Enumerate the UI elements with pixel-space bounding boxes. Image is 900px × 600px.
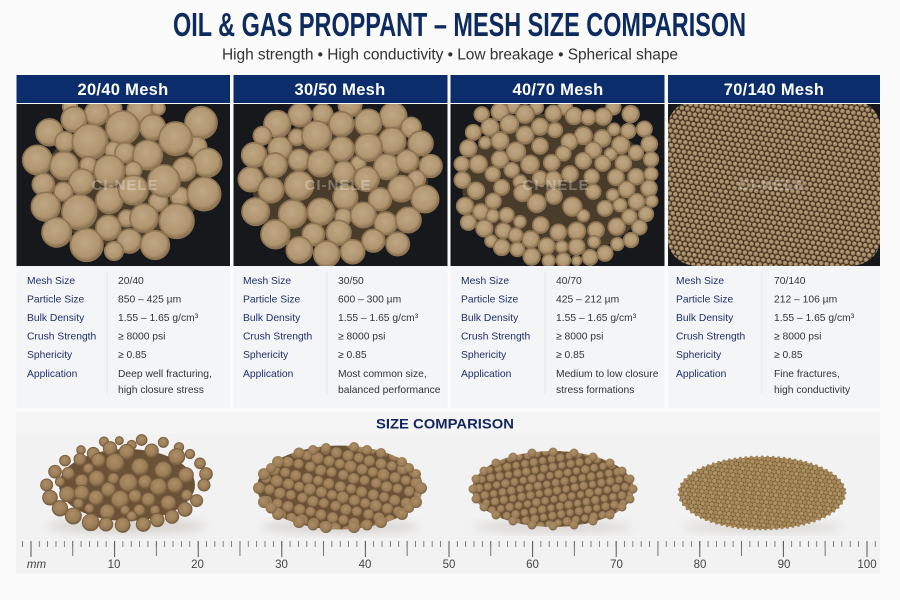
heading: 70/140 mesh: 70/140 Mesh: [724, 81, 824, 99]
subtitle: High strength • High conductivity • Low breakage • Spherical shape: [222, 46, 678, 64]
spec table: 40/70: ≥ 0.85: [556, 350, 585, 361]
heading: size comparison: SIZE COMPARISON: [376, 416, 514, 432]
photo: 40/70 proppant: [450, 100, 664, 267]
spec table: 30/50: balanced performance: [338, 385, 441, 396]
spec table: 70/140: Fine fractures,: [774, 369, 840, 380]
spec table: 70/140: ≥ 0.85: [774, 350, 803, 361]
spec table: 30/50: [234, 266, 448, 408]
spec table: 70/140: Mesh Size: [676, 276, 724, 287]
ruler: 60: [526, 559, 539, 571]
panel: 40/70 mesh: [450, 75, 664, 408]
spec table: 30/50: ≥ 0.85: [338, 350, 367, 361]
ruler: 70: [610, 559, 623, 571]
spec table: 40/70: 425 – 212 µm: [556, 294, 619, 306]
spec table: 40/70: Particle Size: [461, 294, 518, 306]
spec table: 20/40: Particle Size: [27, 294, 84, 306]
spec table: 30/50: Sphericity: [243, 350, 289, 361]
spec table: 20/40: 850 – 425 µm: [118, 294, 181, 306]
panel: 20/40 mesh: [16, 75, 230, 408]
watermark: CI-NELE: [522, 177, 590, 194]
spec table: 30/50: 30/50: [338, 276, 364, 287]
pile: 20/40: [41, 435, 212, 533]
heading: 30/50 mesh: 30/50 Mesh: [294, 81, 386, 99]
spec table: 70/140: 70/140: [774, 276, 806, 287]
spec table: 70/140: 212 – 106 µm: [774, 294, 837, 306]
spec table: 40/70: Application: [461, 369, 512, 380]
spec table: 70/140: high conductivity: [774, 385, 851, 396]
heading: 20/40 mesh: [16, 75, 230, 103]
ruler: 80: [694, 559, 706, 571]
heading: 40/70 mesh: 40/70 Mesh: [512, 81, 604, 99]
spec table: 70/140: ≥ 8000 psi: [774, 332, 821, 342]
spec table: 70/140: Crush Strength: [676, 332, 746, 342]
spec table: 40/70: Crush Strength: [461, 332, 531, 342]
pile: 70/140: [679, 457, 845, 532]
ruler: 40: [359, 559, 371, 571]
spec table: 40/70: [450, 266, 664, 408]
heading: 70/140 mesh: [668, 75, 880, 103]
heading: 20/40 mesh: 20/40 Mesh: [77, 81, 169, 99]
ruler: 90: [778, 559, 790, 571]
spec table: 20/40: 1.55 – 1.65 g/cm³: [118, 313, 199, 324]
pile: 30/50: [253, 442, 427, 533]
heading: 40/70 mesh: [450, 75, 664, 103]
ruler: mm: [27, 559, 46, 571]
pile: 40/70: [468, 448, 638, 532]
spec table: 20/40: Mesh Size: [27, 276, 75, 287]
ruler: 10: [108, 559, 120, 571]
spec table: 20/40: Deep well fracturing,: [118, 369, 212, 380]
spec table: 20/40: Application: [27, 369, 78, 380]
ruler: [22, 544, 880, 571]
photo: 30/50 proppant: [234, 93, 448, 267]
spec table: 40/70: Mesh Size: [461, 276, 509, 287]
spec table: 30/50: Mesh Size: [243, 276, 291, 287]
panel: size comparison: [16, 412, 880, 574]
ruler: 20: [191, 559, 204, 571]
spec table: 70/140: Sphericity: [676, 350, 722, 361]
spec table: 70/140: 1.55 – 1.65 g/cm³: [774, 313, 855, 324]
spec table: 40/70: ≥ 8000 psi: [556, 332, 603, 342]
watermark: CI-NELE: [92, 177, 158, 194]
spec table: 70/140: Application: [676, 369, 727, 380]
ruler: 100: [857, 559, 877, 571]
watermark: CI-NELE: [738, 177, 806, 194]
spec table: 30/50: Application: [243, 369, 294, 380]
panel: 70/140 mesh: [668, 75, 880, 408]
spec table: 30/50: Most common size,: [338, 369, 427, 380]
spec table: 30/50: 600 – 300 µm: [338, 294, 401, 306]
spec table: 20/40: high closure stress: [118, 385, 204, 396]
spec table: 70/140: Particle Size: [676, 294, 733, 306]
ruler: 50: [443, 559, 455, 571]
spec table: 20/40: Sphericity: [27, 350, 73, 361]
watermark: CI-NELE: [304, 177, 372, 194]
spec table: 70/140: [668, 266, 880, 408]
spec table: 20/40: ≥ 0.85: [118, 350, 147, 361]
spec table: 70/140: Bulk Density: [676, 313, 734, 324]
spec table: 30/50: Particle Size: [243, 294, 300, 306]
panel: 30/50 mesh: [234, 75, 448, 408]
spec table: 30/50: 1.55 – 1.65 g/cm³: [338, 313, 419, 324]
spec table: 30/50: ≥ 8000 psi: [338, 332, 385, 342]
spec table: 30/50: Crush Strength: [243, 332, 313, 342]
spec table: 40/70: Bulk Density: [461, 313, 519, 324]
spec table: 40/70: Sphericity: [461, 350, 507, 361]
spec table: 20/40: [16, 266, 230, 408]
spec table: 40/70: 40/70: [556, 276, 582, 287]
photo: 20/40 proppant: [16, 97, 230, 266]
spec table: 20/40: ≥ 8000 psi: [118, 332, 165, 342]
spec table: 40/70: Medium to low closure: [556, 369, 659, 380]
spec table: 20/40: 20/40: [118, 276, 144, 287]
ruler: 30: [275, 559, 288, 571]
spec table: 30/50: Bulk Density: [243, 313, 301, 324]
spec table: 40/70: 1.55 – 1.65 g/cm³: [556, 313, 637, 324]
photo: 70/140 proppant: [668, 100, 880, 266]
heading: 30/50 mesh: [234, 75, 448, 103]
spec table: 20/40: Crush Strength: [27, 332, 97, 342]
spec table: 40/70: stress formations: [556, 385, 634, 396]
spec table: 20/40: Bulk Density: [27, 313, 85, 324]
